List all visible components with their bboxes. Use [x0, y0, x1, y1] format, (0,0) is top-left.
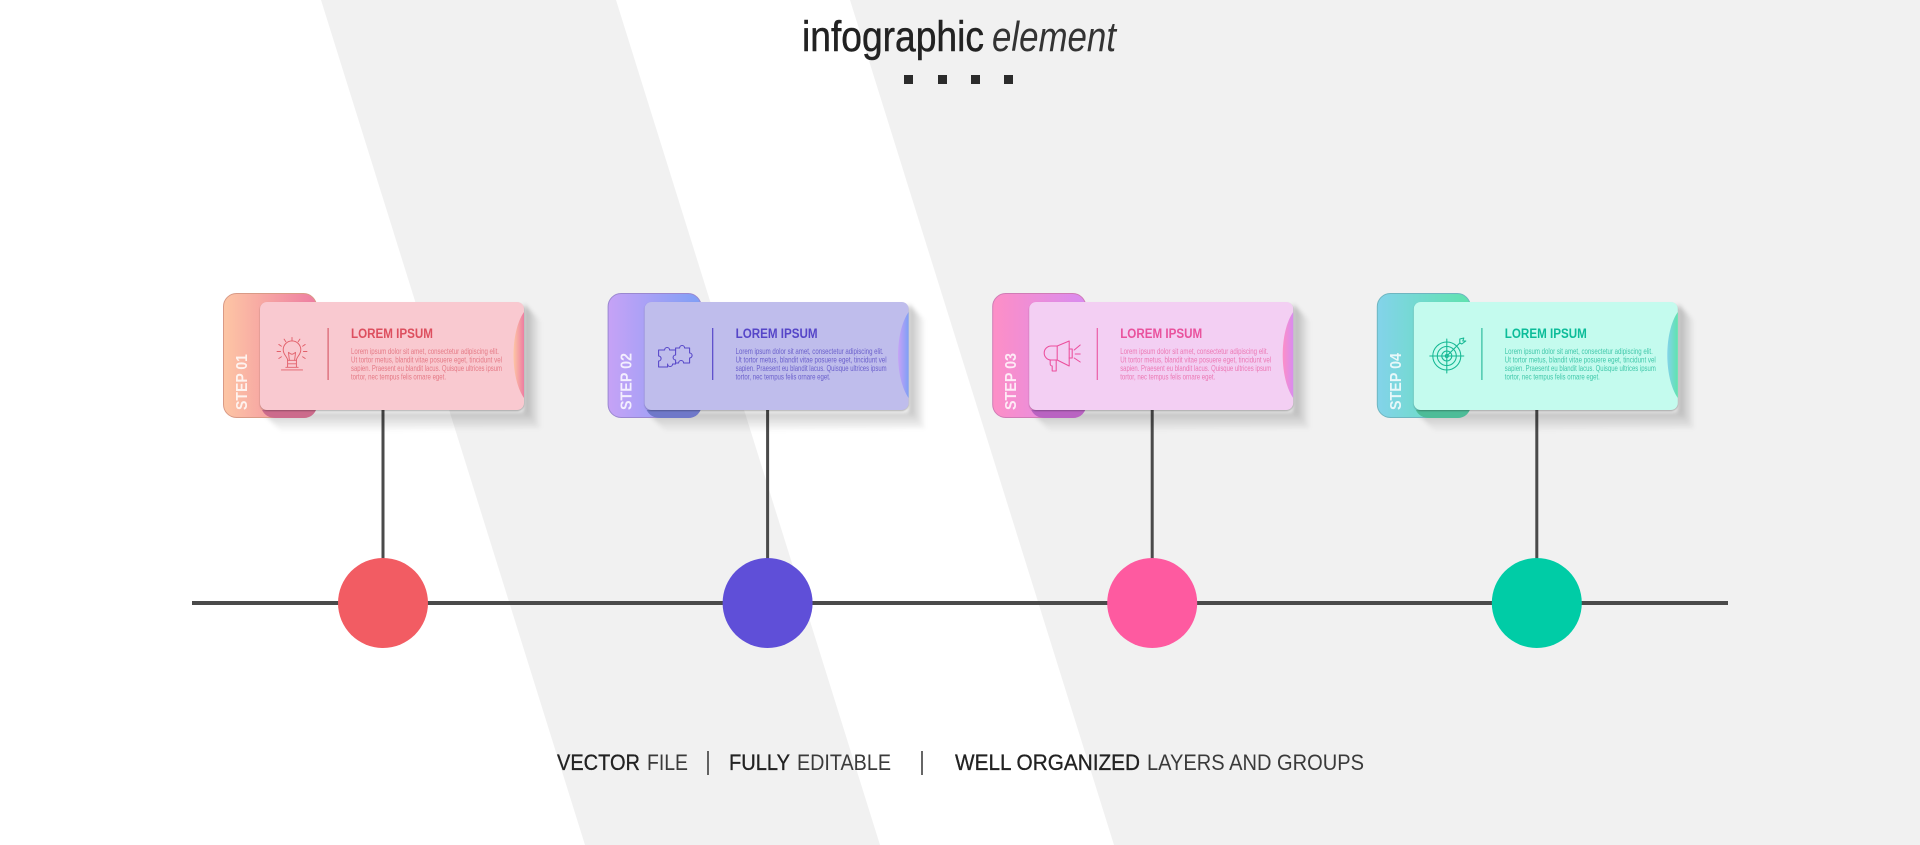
- step 01 body text: Lorem ipsum dolor sit amet, consectetur adipiscing elit.: [351, 347, 499, 356]
- divider: [1481, 328, 1482, 380]
- title: [802, 13, 1118, 61]
- step 04 heading: LOREM IPSUM: [1505, 326, 1587, 341]
- step 04 body text: Lorem ipsum dolor sit amet, consectetur adipiscing elit.: [1505, 347, 1653, 356]
- step 01 heading: LOREM IPSUM: [351, 326, 433, 341]
- step 03 body text: Ut tortor metus, blandit vitae posuere eget, tincidunt vel: [1120, 356, 1271, 364]
- step 03 label: STEP 03: [1003, 353, 1020, 410]
- step 02 heading: LOREM IPSUM: [736, 326, 818, 341]
- step 04 tab: [1377, 294, 1470, 418]
- step 03 card: [1029, 302, 1293, 410]
- step 03 tab: [993, 294, 1086, 418]
- step 02 tab underside: [647, 405, 702, 418]
- step 01 label: STEP 01: [234, 354, 251, 410]
- step 04 body text: Ut tortor metus, blandit vitae posuere eget, tincidunt vel: [1505, 356, 1656, 364]
- step 01 card edge: [260, 303, 524, 411]
- step 03 tab underside: [1031, 405, 1086, 418]
- step 01 stem: [382, 410, 384, 562]
- step 02 card: [645, 302, 909, 410]
- icon: megaphone: [1044, 341, 1080, 371]
- footer tagline: EDITABLE: [797, 750, 891, 775]
- step 04 notch: [1667, 312, 1678, 398]
- step 02 tab: [608, 294, 701, 418]
- step 01 body text: tortor, nec tempus felis ornare eget.: [351, 372, 446, 382]
- step 02 body text: sapien. Praesent eu blandit lacus. Quisque ultrices ipsum: [736, 364, 887, 373]
- step 02 marker: [723, 558, 813, 648]
- step 04 marker: [1492, 558, 1582, 648]
- footer tagline: [557, 750, 1364, 775]
- step 02 shadow: [647, 304, 926, 432]
- step 04 body text: [1505, 347, 1656, 382]
- step 04 card edge: [1414, 303, 1678, 411]
- timeline axis: [192, 601, 1728, 605]
- icon: target: [1430, 338, 1466, 373]
- footer tagline: LAYERS AND GROUPS: [1147, 750, 1364, 775]
- step 03 heading: LOREM IPSUM: [1120, 326, 1202, 341]
- step 01 body text: sapien. Praesent eu blandit lacus. Quisque ultrices ipsum: [351, 364, 502, 373]
- step 01 card: [260, 302, 524, 410]
- step 04 stem: [1535, 410, 1538, 562]
- step 03 marker: [1107, 558, 1197, 648]
- step 03 card edge: [1029, 303, 1293, 411]
- step 03 body text: [1120, 347, 1271, 382]
- step 01 shadow: [262, 304, 541, 432]
- footer tagline: FULLY: [729, 750, 790, 775]
- title dots: [904, 75, 1013, 84]
- step 02: [608, 294, 926, 648]
- step 04 label: STEP 04: [1388, 353, 1405, 410]
- step 01 body text: Ut tortor metus, blandit vitae posuere eget, tincidunt vel: [351, 356, 502, 364]
- step 04 card: [1414, 302, 1678, 410]
- step 03 body text: sapien. Praesent eu blandit lacus. Quisque ultrices ipsum: [1120, 364, 1271, 373]
- step 01: [224, 294, 541, 648]
- step 02 body text: Lorem ipsum dolor sit amet, consectetur adipiscing elit.: [736, 347, 884, 356]
- divider: [1097, 328, 1098, 380]
- step 03 stem: [1151, 410, 1154, 562]
- step 03 notch: [1283, 312, 1293, 398]
- footer tagline: VECTOR: [557, 750, 640, 775]
- icon: puzzle: [659, 346, 692, 367]
- step 04 tab underside: [1416, 405, 1471, 418]
- step 04 body text: tortor, nec tempus felis ornare eget.: [1505, 372, 1600, 382]
- step 02 body text: tortor, nec tempus felis ornare eget.: [736, 372, 831, 382]
- divider: [328, 328, 329, 380]
- step 01 tab: [224, 294, 316, 418]
- step 04: [1377, 294, 1695, 648]
- step 01 marker: [338, 558, 428, 648]
- step 01 body text: [351, 347, 502, 382]
- divider: [712, 328, 713, 380]
- title: infographic: [802, 13, 984, 61]
- step 04 body text: sapien. Praesent eu blandit lacus. Quisque ultrices ipsum: [1505, 364, 1656, 373]
- step 02 body text: Ut tortor metus, blandit vitae posuere eget, tincidunt vel: [736, 356, 887, 364]
- step 03: [993, 294, 1310, 648]
- step 01 tab underside: [262, 405, 317, 418]
- step 02 stem: [766, 410, 769, 562]
- footer tagline: FILE: [647, 750, 688, 775]
- step 02 body text: [736, 347, 887, 382]
- step 01 notch: [514, 312, 524, 398]
- step 03 body text: Lorem ipsum dolor sit amet, consectetur adipiscing elit.: [1120, 347, 1268, 356]
- step 03 shadow: [1031, 304, 1310, 432]
- step 02 label: STEP 02: [619, 353, 636, 410]
- icon: light bulb: [277, 337, 307, 370]
- step 02 card edge: [645, 303, 909, 411]
- step 04 shadow: [1416, 304, 1695, 432]
- step 02 notch: [898, 312, 909, 398]
- footer tagline: WELL ORGANIZED: [955, 750, 1140, 775]
- title: element: [992, 13, 1118, 60]
- step 03 body text: tortor, nec tempus felis ornare eget.: [1120, 372, 1215, 382]
